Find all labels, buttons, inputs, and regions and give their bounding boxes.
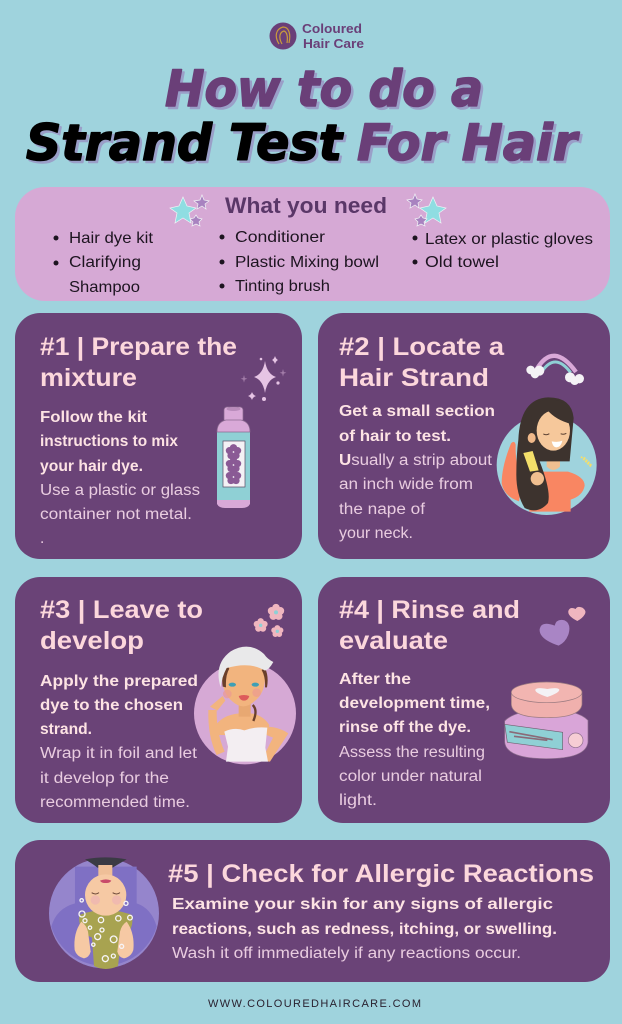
text: step 3 body: dye to the chosen	[40, 697, 183, 714]
text: step 5 body: reactions, such as redness, itching, or swelling.	[172, 921, 557, 938]
heading: step 1: mixture	[40, 364, 137, 392]
logo	[270, 21, 364, 51]
icon: rainbow	[526, 356, 584, 385]
heading: step 1	[40, 333, 237, 392]
heading: step 4: evaluate	[339, 627, 448, 655]
text: step 2 body: an inch wide from	[339, 476, 473, 493]
list: supplies column 1: Hair dye kit	[69, 230, 154, 247]
text: step 3 body: Wrap it in foil and let	[40, 745, 198, 762]
icon: logo hair emblem	[270, 22, 296, 50]
heading: step 4: #4 | Rinse and	[339, 596, 520, 624]
icon: dye bottle	[217, 407, 250, 508]
icon: hearts	[540, 607, 585, 646]
logo text	[302, 21, 364, 51]
text: step 1 body: Use a plastic or glass	[40, 482, 200, 499]
list: supplies column 2: Conditioner	[235, 229, 326, 246]
heading: step 3	[40, 596, 203, 655]
panel: step 4	[318, 577, 610, 823]
icon: stars left	[170, 195, 209, 226]
text: step 2 body: Usually a strip about	[339, 452, 493, 469]
text: step 1 body	[40, 409, 200, 547]
heading: step 2	[339, 333, 505, 392]
footer url: WWW.COLOUREDHAIRCARE.COM	[208, 998, 421, 1010]
text: step 1 body: .	[40, 530, 44, 547]
list: supplies column 1: Clarifying	[69, 254, 141, 271]
text: step 2 body	[339, 403, 495, 542]
heading: step 2: #2 | Locate a	[339, 333, 505, 361]
list: supplies column 2: Tinting brush	[235, 278, 330, 295]
text: step 5 body: Wash it off immediately if any reactions occur.	[172, 945, 521, 962]
text: step 1 body: container not metal.	[40, 506, 192, 523]
text: step 4 body: rinse off the dye.	[339, 719, 471, 736]
text: step 4 body: development time,	[339, 695, 490, 712]
text: step 3 body	[40, 673, 198, 811]
text: step 4 body: light.	[339, 792, 377, 809]
illustration: woman washing hair	[49, 857, 159, 969]
heading: step 3: #3 | Leave to	[40, 596, 203, 624]
list: supplies column 2	[220, 229, 379, 295]
heading: step 5: #5 | Check for Allergic Reactions	[168, 860, 594, 888]
panel: what you need	[15, 187, 610, 301]
title: For Hair	[357, 114, 580, 172]
heading: step 2: Hair Strand	[339, 364, 489, 392]
list: supplies column 1: Shampoo	[69, 279, 140, 296]
logo text: Hair Care	[303, 36, 364, 51]
icon: cream jar	[505, 682, 588, 759]
text: step 3 body: Apply the prepared	[40, 673, 198, 690]
panel: step 1	[15, 313, 302, 559]
text: step 2 body: Get a small section	[339, 403, 495, 420]
title: How to do a	[168, 62, 486, 120]
text: step 3 body: strand.	[40, 721, 92, 738]
text: step 4 body: Assess the resulting	[339, 744, 485, 761]
list: supplies column 2: Plastic Mixing bowl	[235, 254, 379, 271]
icon: stars right	[407, 194, 446, 226]
title: Strand Test	[28, 116, 347, 174]
text: step 1 body: instructions to mix	[40, 433, 178, 450]
icon: sparkles	[241, 356, 286, 401]
text: step 3 body: recommended time.	[40, 794, 190, 811]
panel: step 2	[318, 313, 610, 559]
text: step 1 body: your hair dye.	[40, 458, 143, 475]
text: step 5 body: Examine your skin for any signs of allergic	[172, 896, 553, 913]
title: Strand Test	[26, 114, 344, 172]
logo text: Coloured	[302, 21, 362, 36]
illustration: girl brushing hair	[497, 397, 597, 515]
heading: step 1: #1 | Prepare the	[40, 333, 237, 361]
illustration: woman with towel	[194, 647, 296, 764]
text: step 4 body: After the	[339, 671, 411, 688]
heading: step 3: develop	[40, 627, 144, 655]
text: step 2 body: of hair to test.	[339, 428, 451, 445]
text: step 2 body: the nape of	[339, 501, 426, 518]
text: step 1 body: Follow the kit	[40, 409, 147, 426]
text: step 5 body	[172, 896, 557, 962]
list: supplies column 3: Old towel	[425, 254, 499, 271]
list: supplies column 3: Latex or plastic gloves	[425, 231, 593, 248]
panel: step 5	[15, 840, 610, 982]
list: supplies column 3	[412, 231, 593, 271]
title	[26, 60, 583, 174]
title: For Hair	[360, 116, 583, 174]
icon: flowers	[254, 604, 284, 637]
list: supplies column 1	[54, 230, 154, 296]
text: step 4 body: color under natural	[339, 768, 482, 785]
text: step 2 body: your neck.	[339, 525, 413, 542]
heading: what you need: What you need	[225, 193, 387, 218]
title: How to do a	[165, 60, 483, 118]
panel: step 3	[15, 577, 302, 823]
text: step 4 body	[339, 671, 490, 809]
heading: step 4	[339, 596, 520, 655]
text: step 3 body: it develop for the	[40, 770, 169, 787]
